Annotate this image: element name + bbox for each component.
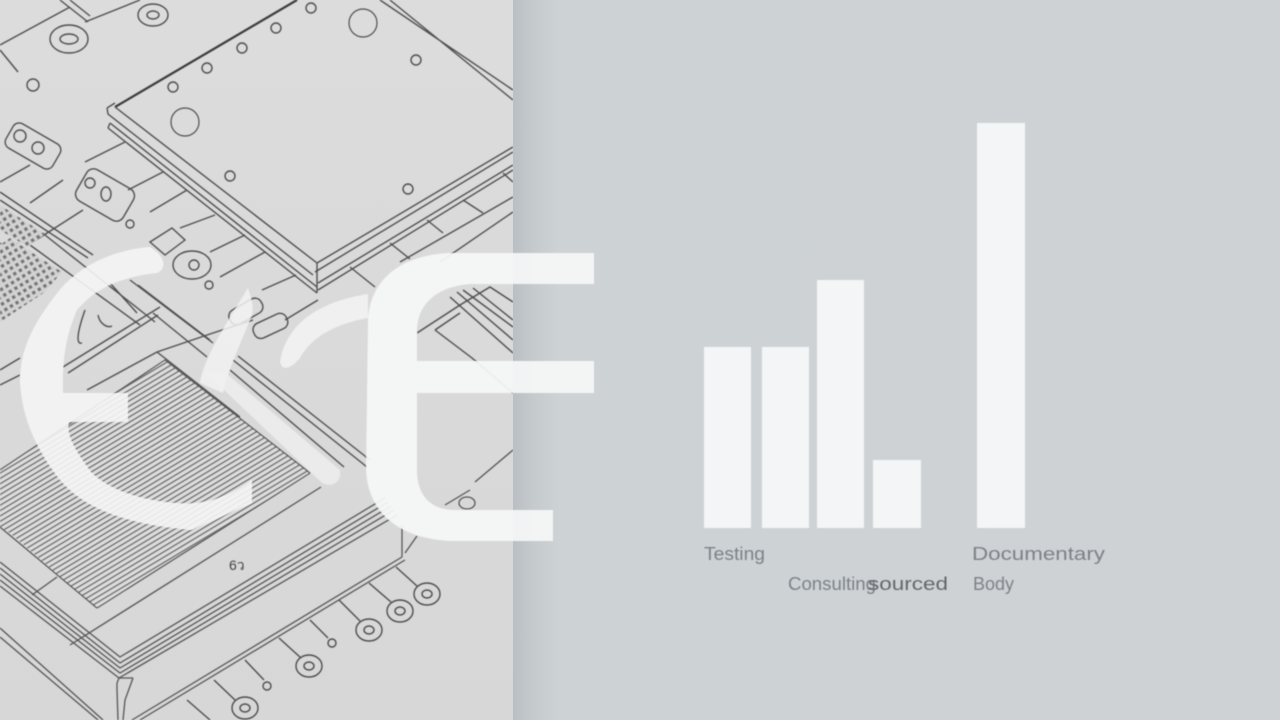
dotted grid strip lower	[0, 238, 62, 322]
right panel background	[513, 0, 1280, 720]
hatched board area	[0, 360, 310, 608]
label: Documentary: Documentary	[972, 544, 1105, 564]
bar: fourth	[873, 460, 921, 528]
small label glyph: 6ว	[229, 557, 245, 573]
label: Consulting: Consulting	[788, 574, 876, 594]
dotted grid strip	[0, 205, 45, 247]
axis labels	[704, 544, 1105, 594]
bar: third	[817, 280, 864, 528]
letter C: outer arc	[20, 247, 252, 530]
left panel: technical line drawing	[0, 0, 513, 720]
bar: Testing	[704, 347, 751, 528]
large CE mark	[20, 247, 594, 541]
label: Body: Body	[973, 574, 1014, 594]
line art	[0, 0, 513, 720]
bar: second	[762, 347, 809, 528]
letter E	[366, 253, 594, 541]
letter C: thin middle stroke	[200, 288, 253, 393]
board frame	[0, 360, 513, 720]
label: Testing: Testing	[704, 544, 765, 564]
upper plate	[107, 0, 513, 293]
letter C: diagonal stroke	[205, 372, 340, 485]
second arc	[280, 294, 368, 368]
connectors and tabs around the plate	[0, 0, 370, 467]
bar: tallest	[977, 123, 1025, 528]
callout circles along the bottom edge	[187, 567, 440, 720]
right side cluster of lines	[417, 287, 513, 393]
label: sourced: sourced	[868, 574, 948, 594]
bar chart	[704, 123, 1025, 528]
